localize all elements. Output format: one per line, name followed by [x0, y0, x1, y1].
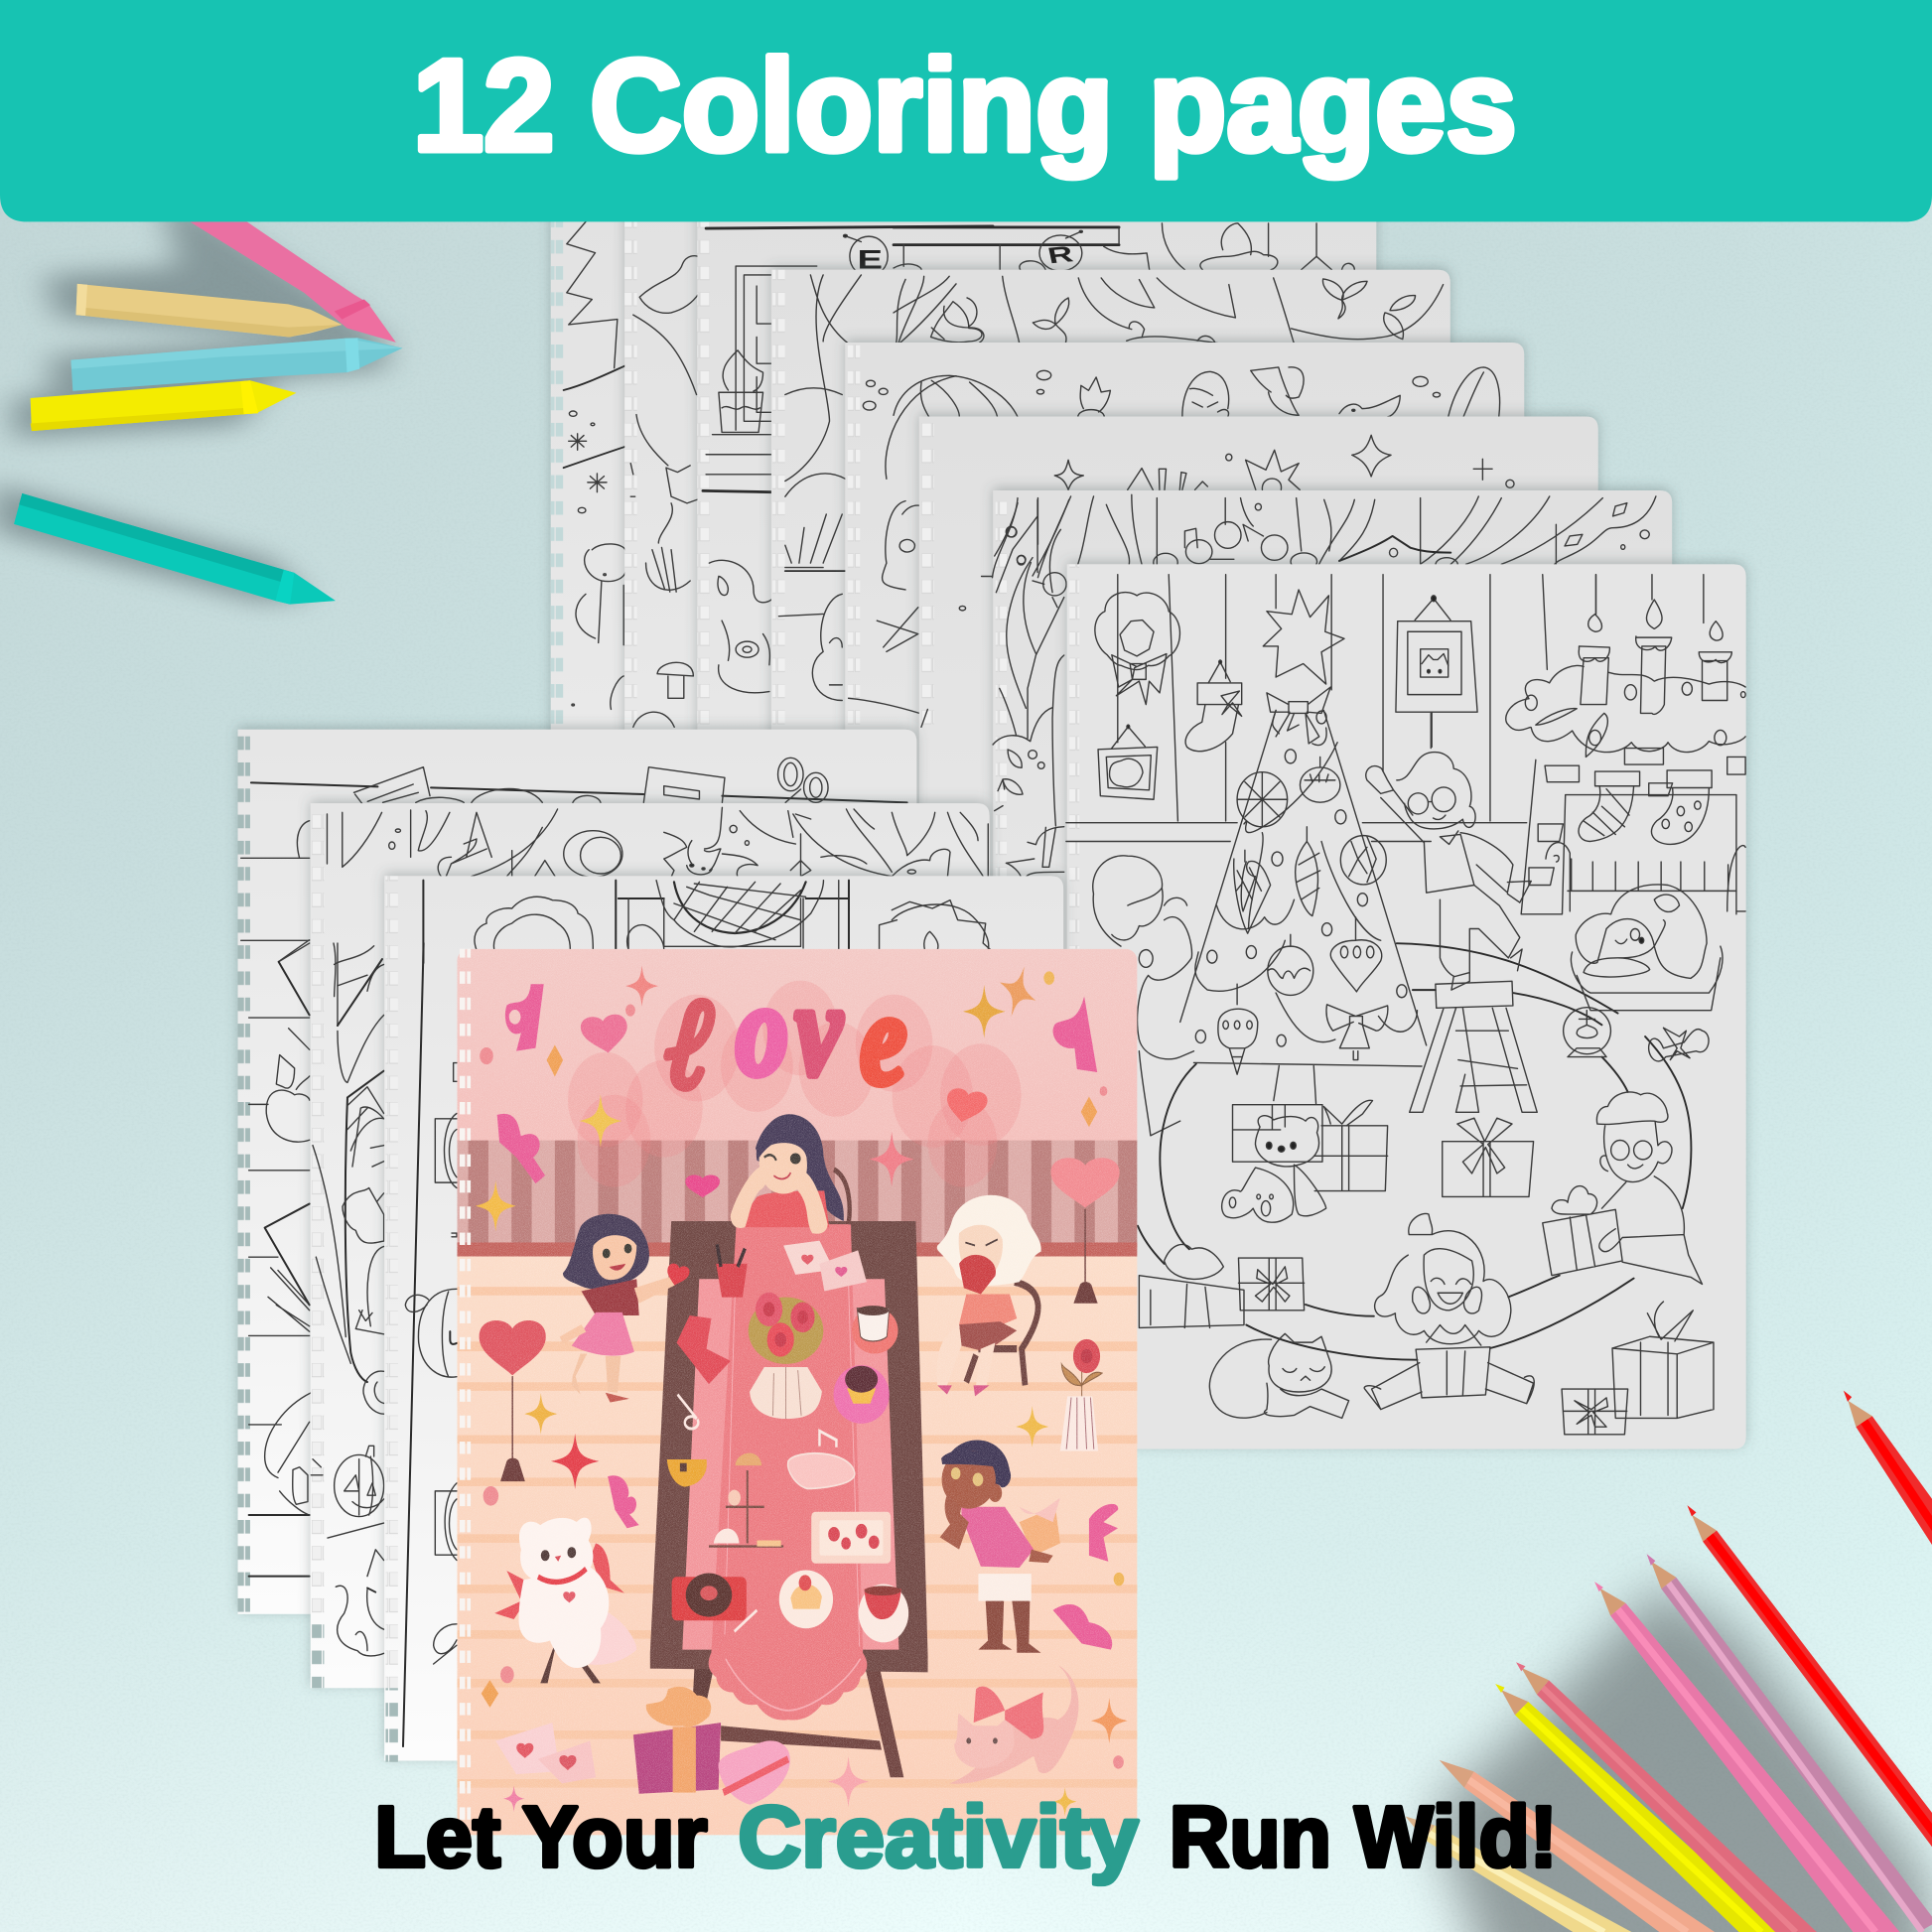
- coloring page 10: [311, 803, 990, 1688]
- lower stack of coloring pages: [238, 730, 1063, 1762]
- balloons: [480, 1209, 1098, 1481]
- character: blonde woman in chair: [937, 1195, 1041, 1396]
- coloring page 5: [845, 343, 1524, 1227]
- wreath: [1095, 593, 1179, 670]
- love lettering: ℓ: [660, 967, 720, 1119]
- stepladder: [1410, 981, 1537, 1112]
- upper stack of coloring pages: [551, 50, 1746, 1449]
- crayon: teal: [14, 493, 336, 605]
- stocking: [1185, 683, 1242, 752]
- wall and floor lines: [1066, 575, 1704, 841]
- pencil: mauve: [1647, 1554, 1932, 1932]
- love lettering: v: [795, 957, 843, 1102]
- pencil: pink: [1594, 1582, 1900, 1932]
- boy on ladder: [1366, 753, 1531, 990]
- character: boy with gift: [940, 1440, 1060, 1653]
- coloring page 11: [384, 876, 1063, 1762]
- tree bow: [1267, 687, 1330, 744]
- pencil: coral: [1516, 1662, 1817, 1932]
- coloring page 7: [993, 490, 1672, 1375]
- character: girl with heart: [560, 1214, 691, 1402]
- rug: [1138, 943, 1691, 1360]
- crayon: pink: [190, 221, 396, 343]
- spiral holes on cover: [460, 949, 471, 1834]
- pencil: pale yellow: [1406, 1817, 1632, 1932]
- fireplace and candles: [1521, 749, 1745, 914]
- slogan: Let Your: [374, 1789, 707, 1885]
- table items: [667, 1241, 908, 1642]
- love lettering: e: [861, 966, 906, 1111]
- stockings on mantle: [1579, 771, 1640, 841]
- gift and heart box: [633, 1687, 790, 1805]
- colored pencils: [1406, 1391, 1932, 1932]
- coloring page 8: Christmas scene: [1066, 564, 1746, 1449]
- header banner: [0, 0, 1932, 221]
- coloring page 3: E: [858, 244, 883, 274]
- coloring page 2: [624, 123, 1304, 1008]
- bear: [1222, 1116, 1326, 1222]
- ornaments: [1237, 772, 1288, 827]
- girl at tree: [1093, 856, 1193, 1136]
- pencil: yellow: [1495, 1684, 1784, 1932]
- slogan: [374, 1789, 1558, 1885]
- pencil shadows: [1432, 1586, 1932, 1932]
- love lettering: o: [737, 957, 788, 1102]
- love letters: [495, 1723, 596, 1783]
- cat with scarf: [1209, 1333, 1349, 1418]
- coloring page 3: [697, 198, 1376, 1082]
- translucent bubbles: [568, 981, 1022, 1187]
- title: 12 Coloring pages: [413, 32, 1517, 178]
- tree star: [1263, 590, 1344, 684]
- coloring page 1: [551, 50, 1230, 934]
- coloring book cover illustration: [457, 949, 1137, 1835]
- pencil: red: [1687, 1505, 1932, 1853]
- love lettering: [663, 997, 907, 1092]
- vase with rose: [1060, 1339, 1102, 1450]
- big frame: [1396, 599, 1477, 747]
- crayon: sky blue: [70, 338, 403, 391]
- banquet table: [650, 1221, 928, 1777]
- hearts, sparkles and ribbons: [476, 957, 1128, 1816]
- coloring page 9: [238, 730, 916, 1614]
- cover background: [457, 949, 1137, 1835]
- slogan: Run Wild!: [1170, 1789, 1558, 1885]
- crayon: yellow: [31, 380, 296, 431]
- character: dark-haired woman at table: [731, 1114, 850, 1234]
- cat with bow: [949, 1665, 1078, 1784]
- girl opening gift: [1375, 1213, 1511, 1345]
- crayon shadows: [0, 182, 386, 603]
- snow globe and bone: [1564, 1008, 1610, 1057]
- small frame: [1098, 727, 1158, 799]
- coloring page 4: [771, 270, 1450, 1155]
- coloring page 6: [919, 416, 1598, 1302]
- bear on stool: [494, 1518, 636, 1683]
- wax crayons: [0, 182, 403, 605]
- slogan: Creativity: [738, 1789, 1139, 1885]
- pencil: peach: [1440, 1760, 1715, 1932]
- coloring page 3: R: [1045, 241, 1075, 269]
- crayon: sand yellow: [76, 284, 342, 337]
- christmas tree: [1180, 710, 1427, 1104]
- sleeping dog on cushion: [1571, 885, 1723, 1011]
- pencil: red upper: [1844, 1391, 1932, 1551]
- presents: [1233, 1105, 1322, 1162]
- paper grain overlay: [457, 949, 1137, 1835]
- boy with gift: [1596, 1092, 1702, 1284]
